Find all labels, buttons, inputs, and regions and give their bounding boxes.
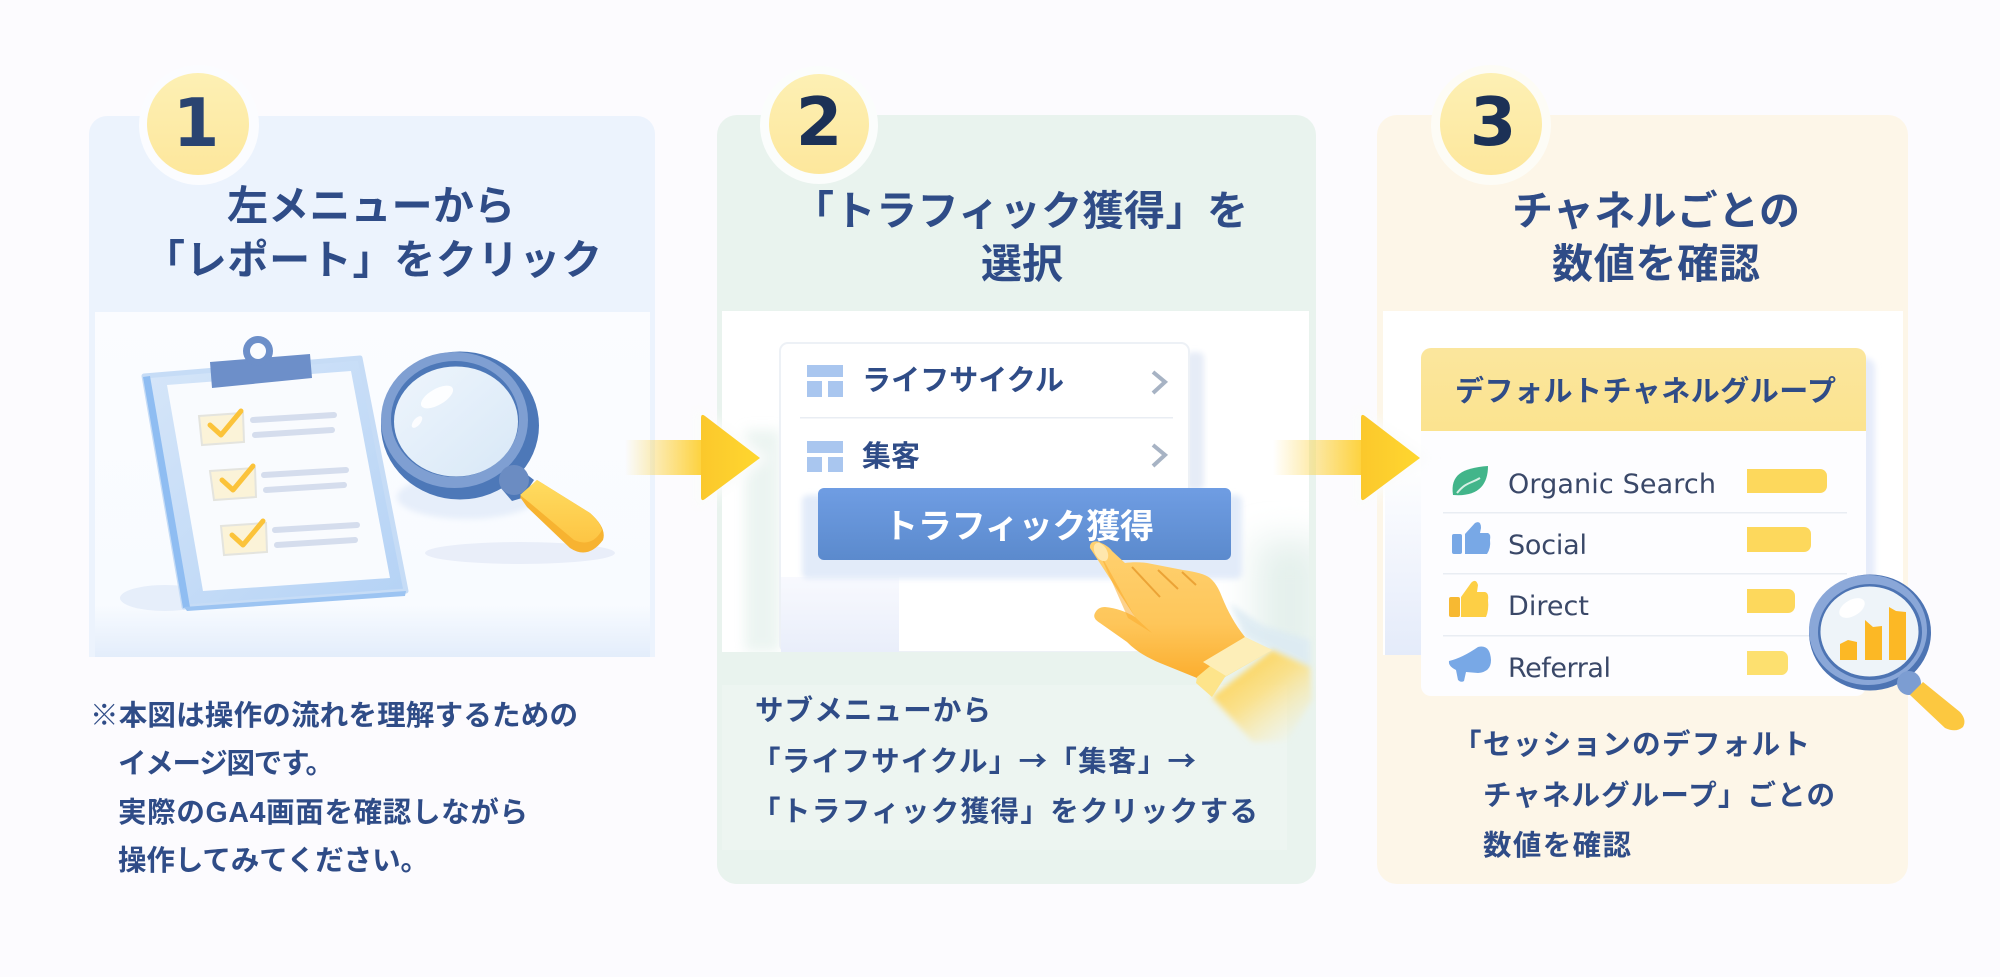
step 3 badge (1431, 65, 1551, 185)
step 3 description (1453, 728, 1835, 862)
step 3 description: 「セッションのデフォルト (1453, 728, 1810, 761)
menu row: acquisition (807, 440, 1165, 473)
step 2 heading (793, 188, 1248, 287)
arrow: step 1 to 2 (625, 405, 770, 512)
illustration: magnifier with bar chart (1809, 574, 1964, 730)
note text: 操作してみてください。 (118, 845, 429, 877)
row: Social (1452, 522, 1811, 561)
step 2 badge (760, 66, 878, 184)
row: Referral: Referral (1508, 653, 1611, 684)
note text: ※本図は操作の流れを理解するための (90, 700, 578, 732)
row: Referral (1449, 647, 1788, 684)
step 3 badge: 3 (1470, 83, 1516, 161)
menu card (780, 343, 1242, 652)
bottom text area of step 2: サブメニューから (755, 694, 991, 727)
menu row: lifecycle (807, 365, 1165, 397)
panel: step 1 (89, 65, 655, 657)
illustration: magnifying glass (381, 352, 615, 564)
row: Organic Search (1453, 466, 1827, 500)
step 3 heading (1512, 188, 1800, 287)
note text: イメージ図です。 (118, 748, 334, 780)
bottom text area of step 2 (717, 652, 1316, 884)
menu row: lifecycle: ライフサイクル (862, 365, 1064, 397)
row: Direct: Direct (1508, 591, 1589, 622)
channel table: デフォルトチャネルグループ (1455, 374, 1836, 408)
row: Social: Social (1508, 530, 1587, 561)
step 3 heading: チャネルごとの (1512, 188, 1800, 234)
step 1 heading: 「レポート」をクリック (144, 237, 602, 283)
step 3 description: チャネルグループ」ごとの (1483, 779, 1835, 812)
step 2 heading: 「トラフィック獲得」を (793, 188, 1248, 234)
step 1 heading (144, 183, 602, 283)
arrow: step 2 to 3 (1273, 405, 1430, 512)
step 2 heading: 選択 (981, 241, 1063, 287)
note text (90, 700, 578, 877)
panel: step 2 (717, 66, 1325, 884)
menu row: acquisition: 集客 (862, 440, 920, 473)
selected button: トラフィック獲得 (884, 508, 1154, 546)
selected button (802, 488, 1242, 579)
illustration: clipboard with checklist (120, 336, 406, 611)
panel: step 3 (1377, 65, 1964, 884)
step 3 description: 数値を確認 (1483, 830, 1631, 862)
icon: pointing hand (1090, 540, 1312, 742)
channel table (1421, 348, 1875, 696)
row: Organic Search: Organic Search (1508, 469, 1716, 500)
step 2 badge: 2 (796, 83, 842, 161)
bottom text area of step 2: 「ライフサイクル」→「集客」→ (752, 739, 1196, 780)
note text: 実際のGA4画面を確認しながら (118, 796, 528, 829)
step 3 heading: 数値を確認 (1552, 241, 1760, 287)
step 1 badge: 1 (173, 84, 219, 162)
row: Direct (1449, 581, 1795, 622)
bottom text area of step 2: 「トラフィック獲得」をクリックする (752, 796, 1258, 828)
step 1 heading: 左メニューから (227, 183, 515, 229)
step 1 badge (139, 65, 259, 185)
